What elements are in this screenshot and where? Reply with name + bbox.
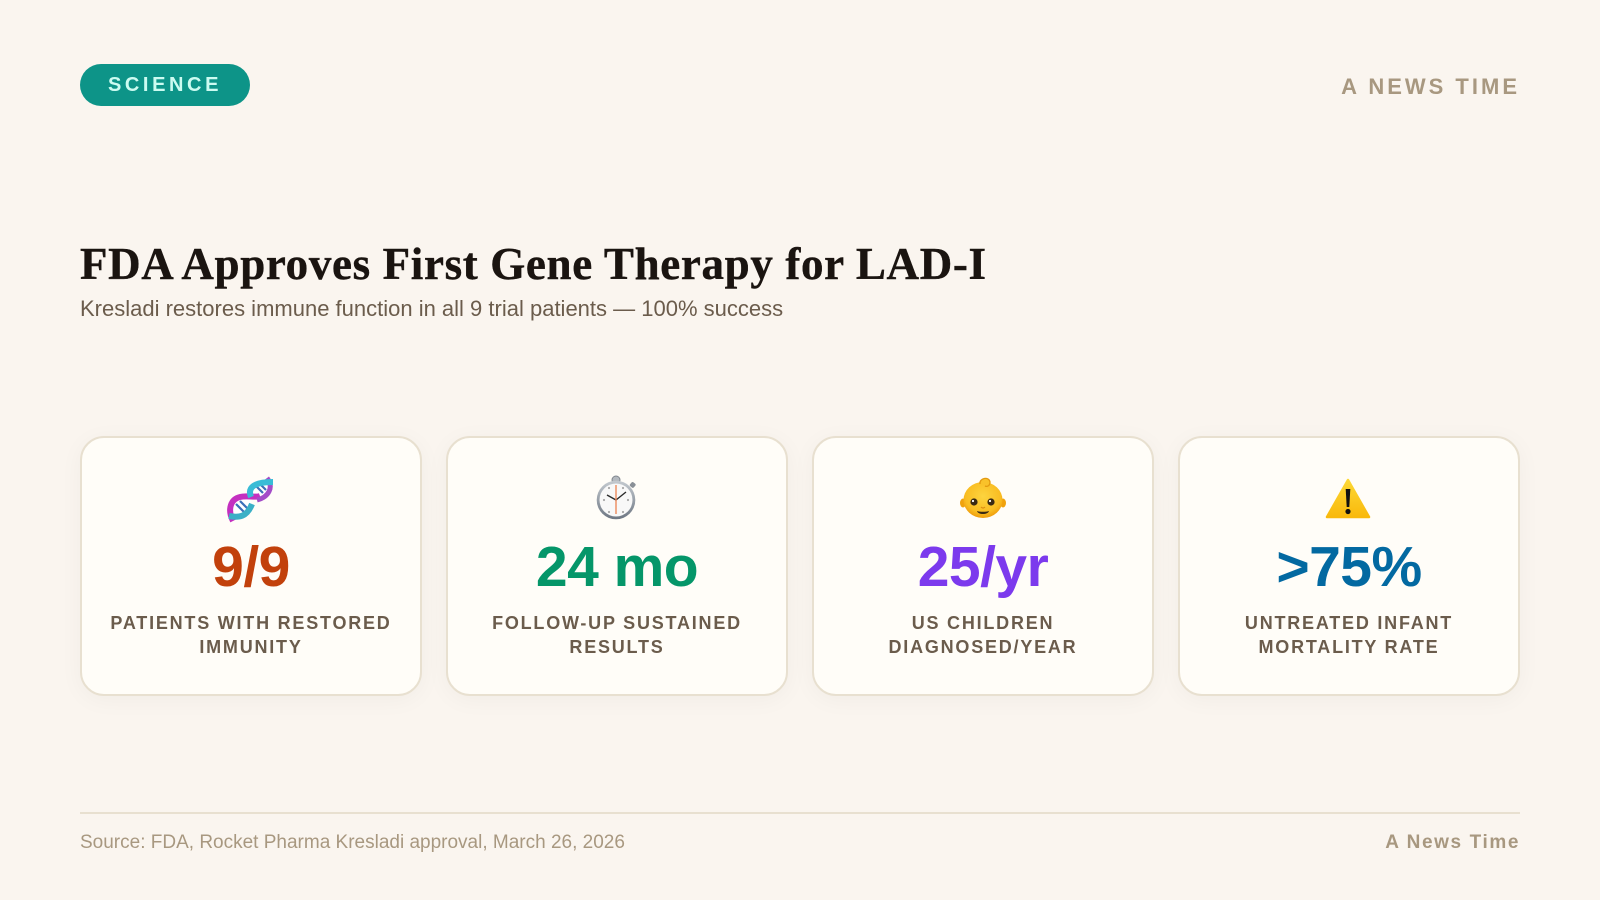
stat value: 25/yr [918, 535, 1048, 599]
icon: stopwatch [596, 476, 636, 520]
stat label [492, 613, 742, 657]
category badge [80, 64, 250, 106]
brand name top right: A NEWS TIME [1341, 74, 1520, 99]
stat label: DIAGNOSED/YEAR [889, 637, 1077, 657]
icon: warning sign [1326, 478, 1370, 518]
panel: patients with restored immunity [80, 436, 422, 696]
category badge: SCIENCE [108, 74, 222, 96]
icon: baby face [960, 478, 1006, 518]
icon: DNA helix [227, 476, 273, 522]
footer brand: A News Time [1385, 832, 1520, 853]
source note: Source: FDA, Rocket Pharma Kresladi approval, March 26, 2026 [80, 832, 625, 853]
stat label [1245, 613, 1453, 657]
stat label: UNTREATED INFANT [1245, 613, 1453, 633]
subtitle: Kresladi restores immune function in all 9 trial patients — 100% success [80, 296, 783, 321]
stat label: IMMUNITY [199, 637, 303, 657]
footer rule [80, 812, 1520, 814]
stat label [889, 613, 1077, 657]
stat label: PATIENTS WITH RESTORED [110, 613, 392, 633]
stat label: RESULTS [569, 637, 665, 657]
stat value: 24 mo [536, 535, 698, 599]
stat label: FOLLOW-UP SUSTAINED [492, 613, 742, 633]
title: FDA Approves First Gene Therapy for LAD-I [80, 239, 987, 289]
panel: US children diagnosed per year [812, 436, 1154, 696]
stat label [110, 613, 392, 657]
panel: untreated infant mortality rate [1178, 436, 1520, 696]
stat label: MORTALITY RATE [1259, 637, 1439, 657]
stat value: >75% [1276, 535, 1422, 599]
panel: follow-up sustained results [446, 436, 788, 696]
stat label: US CHILDREN [912, 613, 1054, 633]
stat value: 9/9 [212, 535, 290, 599]
